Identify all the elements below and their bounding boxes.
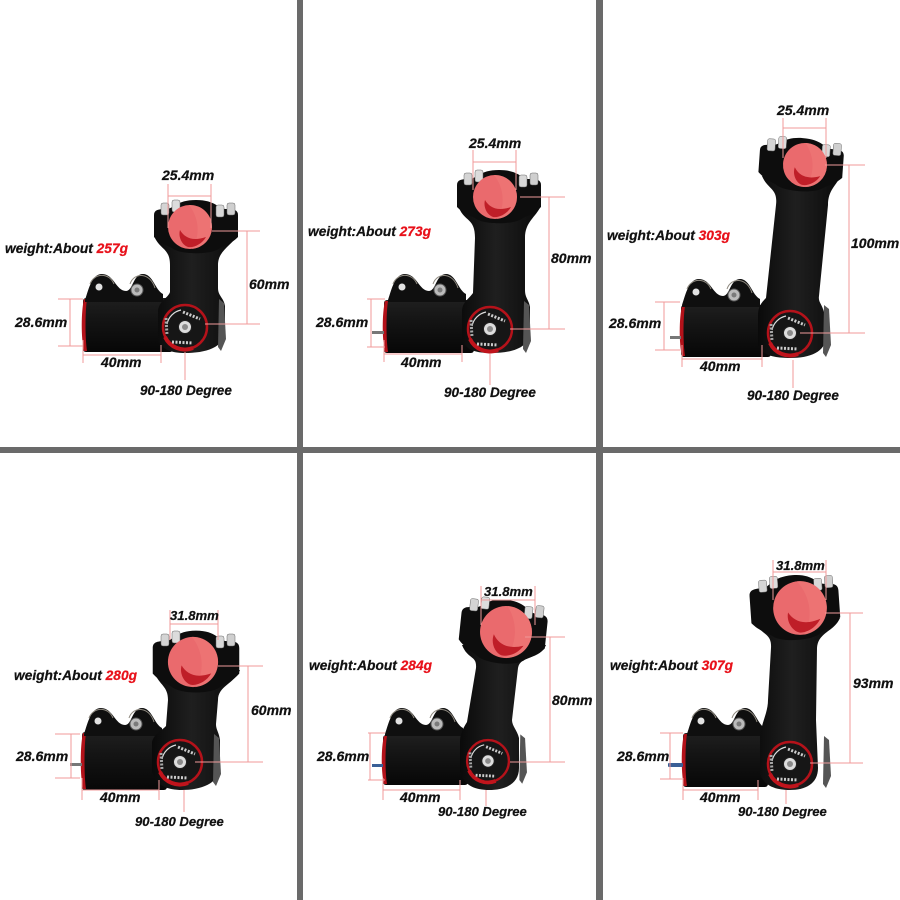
dimension lines xyxy=(368,586,565,806)
label: angle: 90-180 Degree xyxy=(747,388,839,403)
label: weight: weight:About 284g xyxy=(309,658,433,673)
label: steerer: 28.6mm xyxy=(616,748,669,764)
label: angle: 90-180 Degree xyxy=(438,804,527,819)
panel: 25.4mm 60mm stem xyxy=(5,167,289,398)
stem photo xyxy=(82,200,238,353)
label: height: 80mm xyxy=(552,692,592,708)
stem photo xyxy=(670,135,845,358)
label: steerer: 28.6mm xyxy=(608,315,661,331)
label: clamp length: 40mm xyxy=(699,358,740,374)
label: steerer: 28.6mm xyxy=(14,314,67,330)
label: bar bore: 31.8mm xyxy=(170,608,219,623)
label: clamp length: 40mm xyxy=(100,354,141,370)
stem photo xyxy=(372,595,549,790)
label: steerer: 28.6mm xyxy=(15,748,68,764)
panel: 31.8mm 93mm stem xyxy=(610,558,893,819)
label: bar bore: 31.8mm xyxy=(776,558,825,573)
label: clamp length: 40mm xyxy=(99,789,140,805)
dimension lines xyxy=(655,118,865,388)
dimension lines xyxy=(367,150,565,385)
label: angle: 90-180 Degree xyxy=(444,385,536,400)
label: height: 80mm xyxy=(551,250,591,266)
label: clamp length: 40mm xyxy=(400,354,441,370)
label: angle: 90-180 Degree xyxy=(738,804,827,819)
label: bar bore: 25.4mm xyxy=(776,102,829,118)
label: weight: weight:About 280g xyxy=(14,668,138,683)
stem photo xyxy=(372,170,541,353)
label: height: 100mm xyxy=(851,235,899,251)
panel: 25.4mm 100mm stem xyxy=(607,102,899,403)
panel: 31.8mm 80mm stem xyxy=(309,584,592,819)
label: height: 93mm xyxy=(853,675,893,691)
label: height: 60mm xyxy=(251,702,291,718)
panel: 31.8mm 60mm stem xyxy=(14,608,291,829)
dimension lines xyxy=(55,610,263,812)
label: angle: 90-180 Degree xyxy=(135,814,224,829)
label: bar bore: 31.8mm xyxy=(484,584,533,599)
label: bar bore: 25.4mm xyxy=(161,167,214,183)
label: height: 60mm xyxy=(249,276,289,292)
label: steerer: 28.6mm xyxy=(315,314,368,330)
label: weight: weight:About 307g xyxy=(610,658,734,673)
label: bar bore: 25.4mm xyxy=(468,135,521,151)
label: clamp length: 40mm xyxy=(699,789,740,805)
dimension lines xyxy=(660,560,863,804)
label: weight: weight:About 273g xyxy=(308,224,432,239)
stem photo xyxy=(668,572,842,790)
label: weight: weight:About 303g xyxy=(607,228,731,243)
label: weight: weight:About 257g xyxy=(5,241,129,256)
dimension lines xyxy=(58,184,260,380)
label: angle: 90-180 Degree xyxy=(140,383,232,398)
label: clamp length: 40mm xyxy=(399,789,440,805)
stem photo xyxy=(70,631,240,790)
panel: 25.4mm 80mm stem xyxy=(308,135,591,400)
label: steerer: 28.6mm xyxy=(316,748,369,764)
